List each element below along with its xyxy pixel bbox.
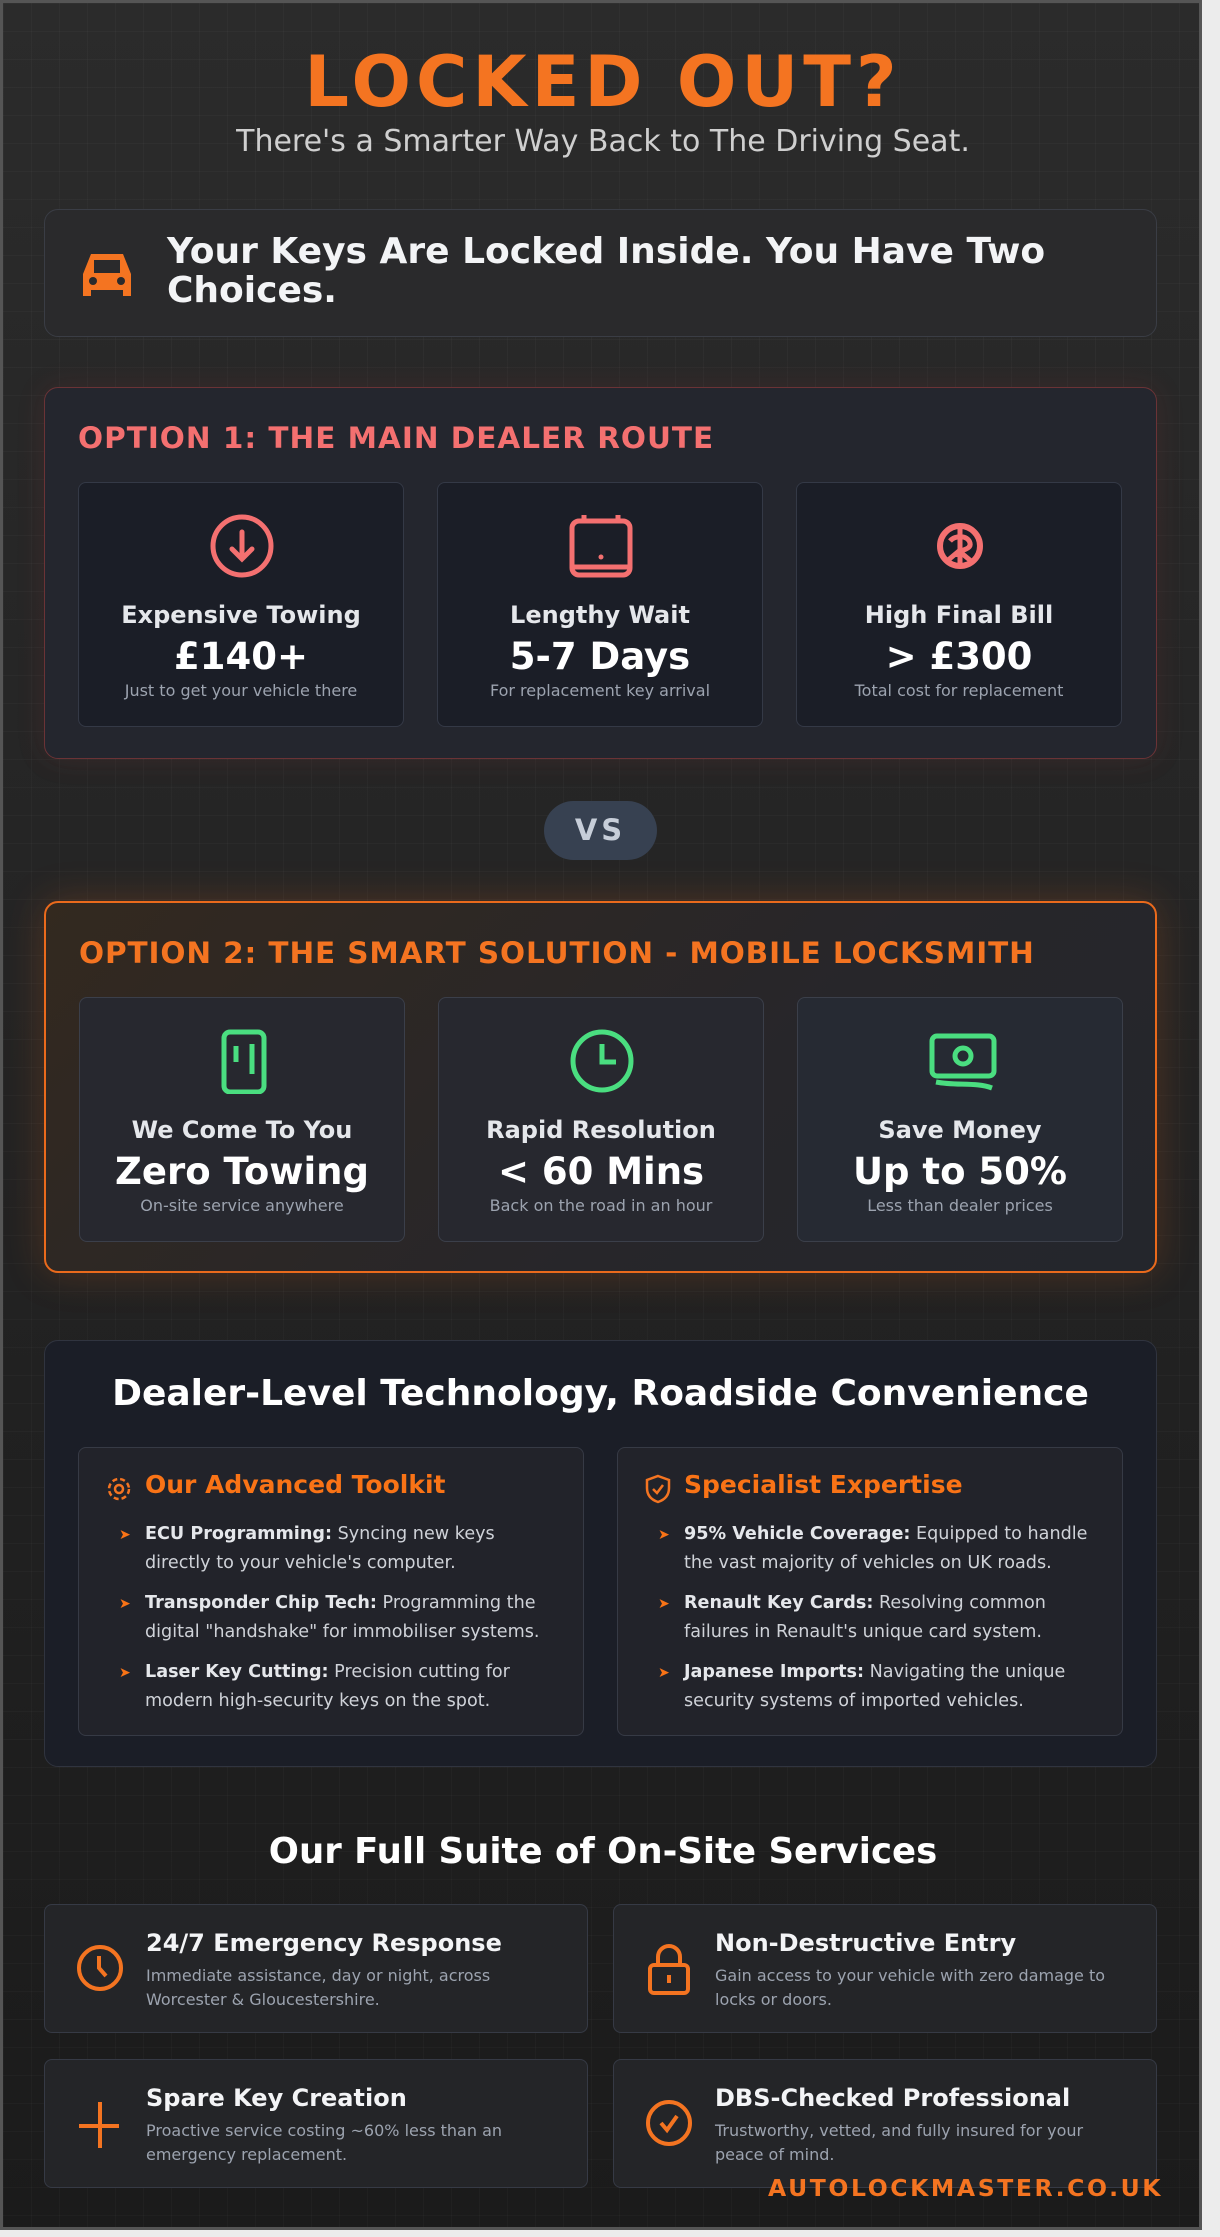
subpanel: toolkit: Our Advanced Toolkit [145,1470,445,1499]
subpanel: toolkit: Transponder Chip Tech: Programming the digital "handshake" for immobiliser systems. [145,1593,540,1642]
VS pill [544,801,657,860]
service: emergency [44,1904,588,2033]
card: save money [797,997,1123,1242]
card: we come to you: On-site service anywhere [140,1196,344,1215]
card: we come to you: We Come To You [132,1116,352,1144]
service: spare key [44,2059,588,2188]
card: wait: 5-7 Days [510,635,690,678]
subpanel: toolkit: ECU Programming: Syncing new keys directly to your vehicle's computer. [145,1524,495,1573]
card: rapid: Rapid Resolution [486,1116,716,1144]
card: rapid [438,997,764,1242]
panel: option 1 [44,387,1157,759]
service: DBS: DBS-Checked Professional [715,2084,1070,2112]
heading: services: Our Full Suite of On-Site Services [269,1831,937,1872]
service: DBS: Trustworthy, vetted, and fully insured for your peace of mind. [715,2121,1083,2164]
intro card [44,209,1157,337]
card: towing: Just to get your vehicle there [125,681,357,700]
subpanel: toolkit [78,1447,584,1736]
heading: Dealer-Level Technology, Roadside Convenience [112,1373,1089,1414]
card: bill: High Final Bill [865,601,1053,629]
title: LOCKED OUT? [304,41,902,123]
service: non-destructive: Non-Destructive Entry [715,1929,1016,1957]
card: towing [78,482,404,727]
card: wait: For replacement key arrival [490,681,710,700]
icon: shield [646,1474,670,1504]
panel: dealer-level technology [44,1340,1157,1767]
subpanel: expertise: Renault Key Cards: Resolving common failures in Renault's unique card system. [684,1593,1046,1642]
subpanel: expertise [617,1447,1123,1736]
card: rapid: Back on the road in an hour [490,1196,712,1215]
service: DBS [613,2059,1157,2188]
card: bill: Total cost for replacement [855,681,1063,700]
icon: gear [108,1478,130,1500]
card: bill: > £300 [886,635,1032,678]
subpanel: toolkit: Laser Key Cutting: Precision cutting for modern high-security keys on the spot. [145,1662,510,1711]
service: non-destructive [613,1904,1157,2033]
heading option 1: OPTION 1: THE MAIN DEALER ROUTE [78,421,714,455]
service: spare key: Proactive service costing ~60% less than an emergency replacement. [146,2121,502,2164]
subtitle: There's a Smarter Way Back to The Driving Seat. [236,124,970,159]
subpanel: expertise: Japanese Imports: Navigating the unique security systems of imported vehicles. [684,1662,1065,1711]
card: we come to you [79,997,405,1242]
service: emergency: 24/7 Emergency Response [146,1929,502,1957]
card: rapid: < 60 Mins [498,1150,704,1193]
card: we come to you: Zero Towing [115,1150,369,1193]
card: save money: Save Money [878,1116,1042,1144]
subpanel: expertise: 95% Vehicle Coverage: Equipped to handle the vast majority of vehicles on UK roads. [684,1524,1087,1573]
panel: option 2 [44,901,1157,1273]
card: save money: Less than dealer prices [867,1196,1053,1215]
heading option 2: OPTION 2: THE SMART SOLUTION - MOBILE LOCKSMITH [79,936,1035,970]
card: towing: £140+ [174,635,308,678]
service: emergency: Immediate assistance, day or night, across Worcester & Gloucestershire. [146,1966,490,2008]
card: towing: Expensive Towing [121,601,361,629]
VS pill: VS [575,813,626,847]
card: wait [437,482,763,727]
footer: website: AUTOLOCKMASTER.CO.UK [768,2174,1163,2202]
card: wait: Lengthy Wait [510,601,690,629]
service: non-destructive: Gain access to your vehicle with zero damage to locks or doors. [715,1966,1105,2008]
service: spare key: Spare Key Creation [146,2084,407,2112]
card: save money: Up to 50% [853,1150,1067,1193]
icon: car [83,254,131,296]
subpanel: expertise: Specialist Expertise [684,1470,963,1499]
intro text: Your Keys Are Locked Inside. You Have Two Choices. [167,231,1045,311]
card: bill [796,482,1122,727]
